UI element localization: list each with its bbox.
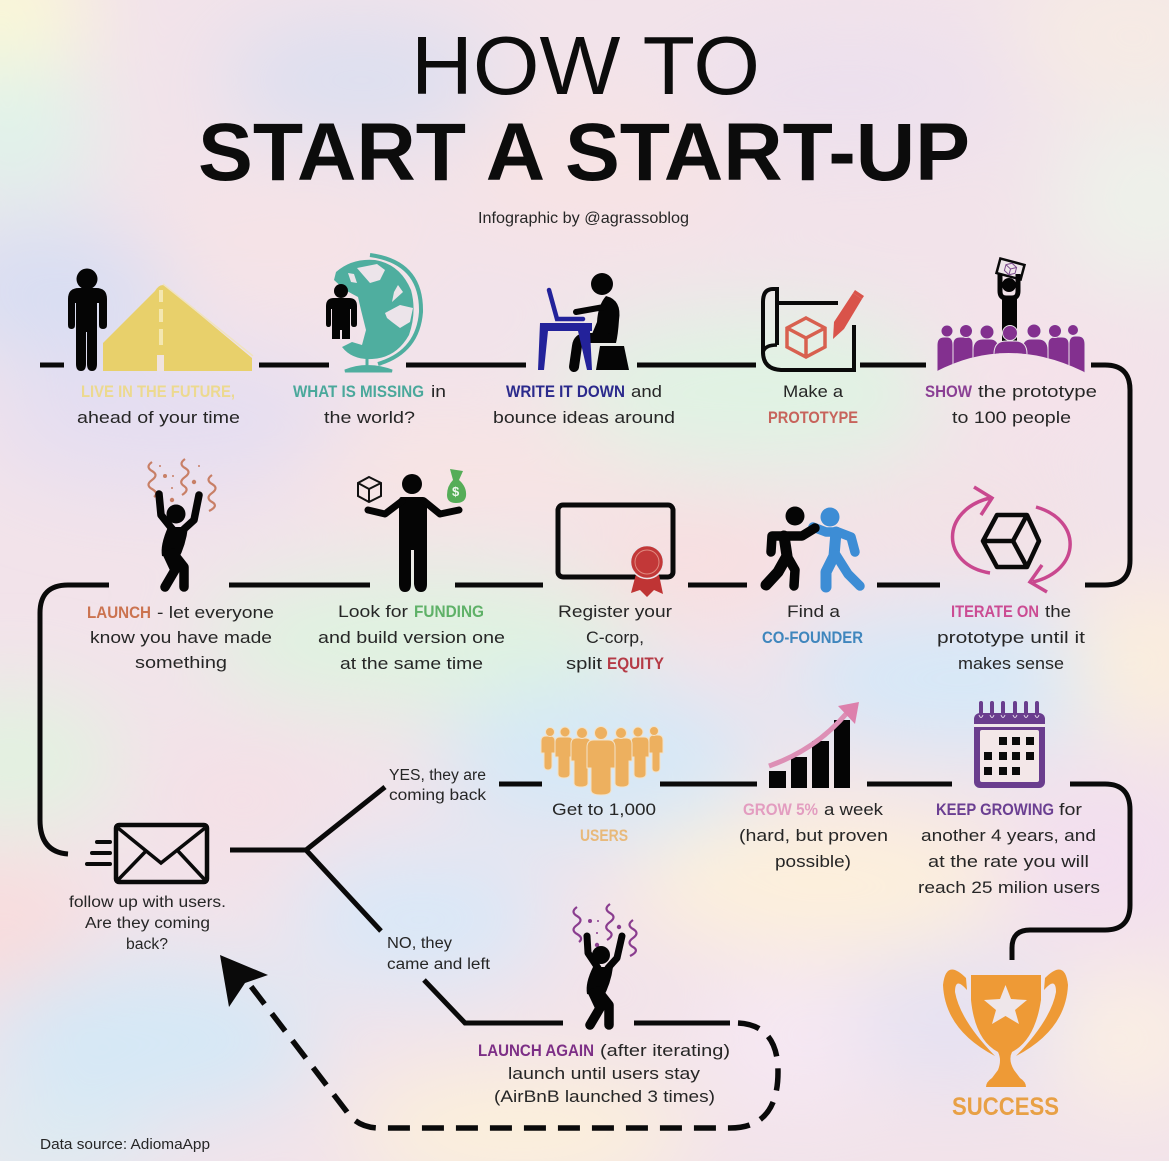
step: make a prototype xyxy=(763,289,864,427)
caption second line: the world? xyxy=(324,408,415,427)
caption second line: bounce ideas around xyxy=(493,408,675,427)
icon: presenter holding sign above crowd xyxy=(937,259,1085,380)
caption: Find a xyxy=(787,602,841,621)
icon: person with cube and money bag xyxy=(358,469,466,592)
caption second line: (hard, but proven xyxy=(739,826,888,845)
connector path: row three to success xyxy=(499,784,1130,960)
icon: calendar xyxy=(974,703,1045,788)
subtitle credit: Infographic by @agrassoblog xyxy=(478,210,689,227)
caption second line: and build version one xyxy=(318,628,505,647)
caption word: the xyxy=(1045,602,1071,621)
step: follow up with users xyxy=(69,825,226,953)
title: HOW TO xyxy=(411,19,760,112)
caption third line bold: EQUITY xyxy=(607,654,665,673)
caption third line: (AirBnB launched 3 times) xyxy=(494,1087,715,1106)
caption words: - let everyone xyxy=(157,603,274,622)
step: look for funding xyxy=(318,469,505,673)
icon: celebrating person with purple confetti xyxy=(574,904,636,1025)
caption third line: back? xyxy=(126,936,168,953)
caption word: for xyxy=(1059,800,1082,819)
caption second line: USERS xyxy=(580,826,628,845)
label: yes branch: coming back xyxy=(389,787,486,804)
caption third line: at the rate you will xyxy=(928,852,1089,871)
caption words: a week xyxy=(824,800,884,819)
caption bold: SHOW xyxy=(925,382,973,401)
caption third line: something xyxy=(135,653,227,672)
caption bold: LAUNCH xyxy=(87,603,151,622)
icon: rising bar chart with arrow xyxy=(769,702,859,788)
caption word: in xyxy=(431,382,446,401)
caption: Get to 1,000 xyxy=(552,800,656,819)
step: get to 1,000 users xyxy=(541,726,663,845)
icon: person with cube and money bag: $ xyxy=(452,484,460,499)
caption word: Look for xyxy=(338,602,408,621)
caption second line: know you have made xyxy=(90,628,272,647)
caption second line: launch until users stay xyxy=(508,1064,701,1083)
caption word: and xyxy=(631,382,662,401)
step: launch again xyxy=(478,904,730,1106)
icon: person and road xyxy=(68,268,253,371)
icon: two people shaking hands xyxy=(766,506,860,587)
caption bold: ITERATE ON xyxy=(951,602,1039,621)
caption second line: prototype until it xyxy=(937,628,1085,647)
icon: person at desk with laptop xyxy=(538,273,629,370)
icon: orange trophy with star xyxy=(943,969,1068,1087)
connector path: row two xyxy=(40,585,940,854)
step: keep growing xyxy=(918,703,1100,897)
caption: Register your xyxy=(558,602,672,621)
label: no branch: came and left xyxy=(387,956,491,973)
step: what is missing xyxy=(293,255,446,427)
caption bold: WHAT IS MISSING xyxy=(293,382,424,401)
step: find a co-founder xyxy=(762,506,863,647)
caption: SUCCESS xyxy=(952,1093,1059,1121)
caption second line: Are they coming xyxy=(85,915,210,932)
caption words: the prototype xyxy=(978,382,1097,401)
caption fourth line: reach 25 milion users xyxy=(918,878,1100,897)
label: no branch xyxy=(387,935,491,973)
icon: blueprint, cube and pencil xyxy=(763,289,864,370)
icon: person and globe xyxy=(326,255,421,371)
caption: LIVE IN THE FUTURE, xyxy=(81,382,235,401)
dashed arrow loop back xyxy=(220,955,778,1128)
caption third line word: split xyxy=(566,654,602,673)
step: iterate xyxy=(937,487,1085,673)
caption second line: another 4 years, and xyxy=(921,826,1096,845)
label: no branch: NO, they xyxy=(387,935,452,952)
caption third line: makes sense xyxy=(958,654,1064,673)
icon: orange crowd xyxy=(541,726,663,795)
caption: follow up with users. xyxy=(69,894,226,911)
caption: ahead of your time xyxy=(77,408,240,427)
caption xyxy=(77,382,240,427)
step: register c-corp xyxy=(558,505,673,673)
label: yes branch: YES, they are xyxy=(389,767,486,784)
step: live in the future xyxy=(68,268,253,427)
caption bold: GROW 5% xyxy=(743,800,818,819)
step: write it down xyxy=(493,273,675,427)
label: yes branch xyxy=(389,767,486,804)
caption second line: C-corp, xyxy=(586,628,644,647)
icon: cube with cycle arrows xyxy=(952,487,1070,592)
caption: Make a xyxy=(783,382,844,401)
step: show the prototype xyxy=(925,259,1097,427)
icon: certificate with red rosette xyxy=(558,505,673,597)
title xyxy=(198,19,970,198)
step: grow 5% a week xyxy=(739,702,888,871)
caption third line: possible) xyxy=(775,852,851,871)
caption second line: PROTOTYPE xyxy=(768,408,858,427)
caption bold: LAUNCH AGAIN xyxy=(478,1041,594,1060)
title: START A START-UP xyxy=(198,107,970,198)
caption bold: KEEP GROWING xyxy=(936,800,1054,819)
connector path: launch again line xyxy=(424,980,730,1023)
data source: Data source: AdiomaApp xyxy=(40,1136,210,1153)
connector path: row one xyxy=(40,365,1130,585)
caption second line: to 100 people xyxy=(952,408,1071,427)
caption bold: WRITE IT DOWN xyxy=(506,382,625,401)
caption third line: at the same time xyxy=(340,654,483,673)
step: launch xyxy=(87,459,274,672)
caption words: (after iterating) xyxy=(600,1041,730,1060)
icon: envelope with speed lines xyxy=(87,825,207,882)
connector path: yes and no branch xyxy=(230,787,385,931)
icon: celebrating person with confetti xyxy=(148,459,216,587)
caption bold: FUNDING xyxy=(414,602,484,621)
caption second line: CO-FOUNDER xyxy=(762,628,863,647)
step: success xyxy=(943,969,1068,1121)
